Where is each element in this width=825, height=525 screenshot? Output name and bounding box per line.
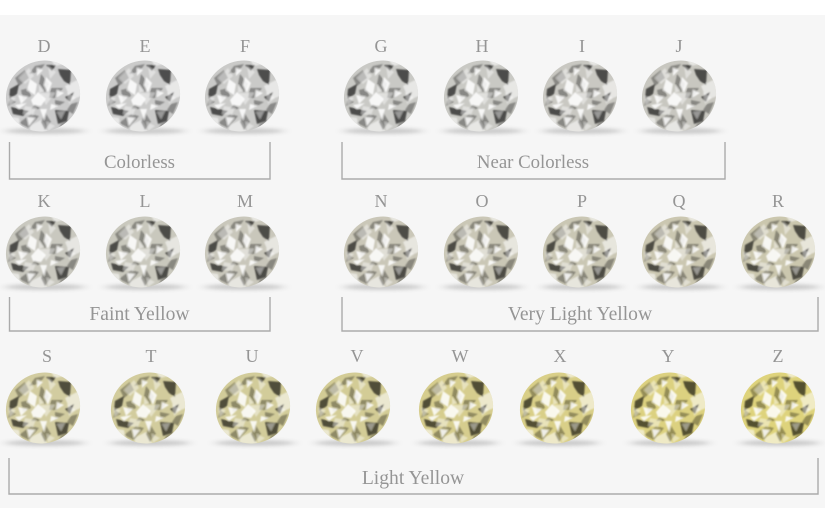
grade F (202, 36, 284, 136)
grade T (108, 346, 190, 448)
row: Near Colorless (341, 36, 725, 179)
grade J (639, 36, 721, 136)
grade H (441, 36, 523, 136)
label: Colorless: Colorless (104, 152, 175, 173)
grade V: V (350, 346, 364, 366)
grade U: U (246, 346, 258, 366)
grade M (202, 191, 284, 292)
grade O (441, 191, 523, 292)
grade K (3, 191, 85, 292)
grade Z (738, 346, 820, 448)
bracket: Light Yellow (9, 458, 818, 494)
grade L (103, 191, 185, 292)
grade Y: Y (662, 346, 674, 366)
grade Q (639, 191, 721, 292)
grade V (313, 346, 395, 448)
grade T: T (146, 346, 156, 366)
grade Z: Z (772, 346, 784, 366)
grade M: M (237, 191, 253, 211)
grade R: R (772, 191, 784, 211)
grade W: W (452, 346, 468, 366)
grade O: O (476, 191, 488, 211)
row: Faint Yellow (3, 191, 284, 331)
label: Light Yellow: Light Yellow (362, 468, 465, 489)
grade Y (628, 346, 710, 448)
row: Colorless (3, 36, 284, 179)
grade S: S (42, 346, 52, 366)
grade P (540, 191, 622, 292)
grade D (3, 36, 85, 136)
grade E: E (140, 36, 150, 56)
bracket: Colorless (10, 142, 270, 179)
grade W (416, 346, 498, 448)
grade N: N (374, 191, 388, 211)
label: Very Light Yellow: Very Light Yellow (508, 304, 653, 325)
grade U (213, 346, 295, 448)
grade K: K (38, 191, 50, 211)
label: Faint Yellow: Faint Yellow (89, 304, 190, 325)
bracket: Near Colorless (342, 142, 725, 179)
grade S (3, 346, 85, 448)
grade I (540, 36, 622, 136)
grade F: F (240, 36, 250, 56)
grade X (517, 346, 599, 448)
grade G (341, 36, 423, 136)
grade D: D (38, 36, 50, 56)
bracket: Faint Yellow (10, 297, 270, 331)
row: Very Light Yellow (341, 191, 820, 331)
grade H: H (476, 36, 488, 56)
grade P: P (577, 191, 587, 211)
grade L: L (140, 191, 150, 211)
grade I: I (579, 36, 585, 56)
label: Near Colorless: Near Colorless (477, 152, 589, 173)
row: Light Yellow (3, 346, 820, 494)
grade X: X (554, 346, 566, 366)
bracket: Very Light Yellow (342, 297, 818, 331)
grade E (103, 36, 185, 136)
grade N (341, 191, 423, 292)
grade R (738, 191, 820, 292)
grade Q: Q (672, 191, 686, 211)
grade J: J (675, 36, 683, 56)
grade G: G (374, 36, 388, 56)
